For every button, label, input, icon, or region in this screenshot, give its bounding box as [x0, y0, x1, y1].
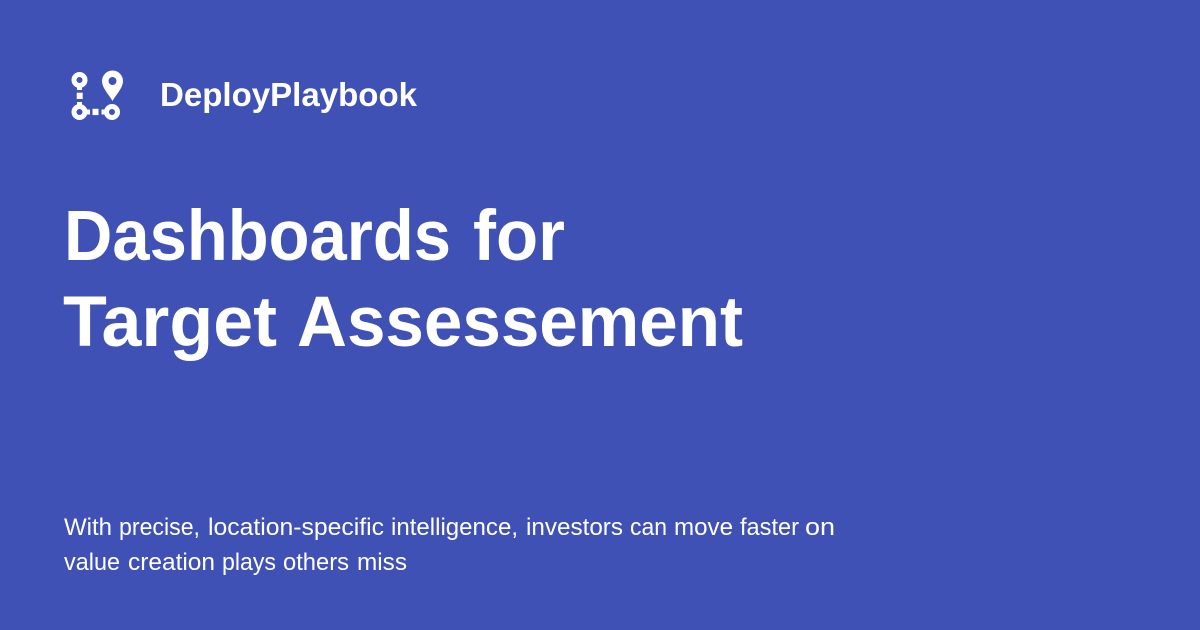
subtitle: intelligence, — [391, 514, 518, 541]
subtitle: investors — [526, 514, 623, 541]
subtitle: location-specific — [208, 514, 384, 541]
subtitle: others — [283, 549, 349, 576]
subtitle: faster — [740, 514, 799, 541]
title: Target — [63, 283, 277, 362]
title: Dashboards — [64, 197, 451, 276]
title: for — [473, 197, 565, 276]
title: Assessement — [297, 283, 743, 362]
subtitle: precise, — [119, 514, 200, 541]
icon: route with map pin — [74, 70, 123, 118]
subtitle: can — [630, 514, 667, 541]
subtitle: move — [674, 514, 733, 541]
subtitle: miss — [357, 549, 407, 576]
subtitle: plays — [222, 549, 276, 576]
subtitle — [64, 514, 835, 576]
subtitle: creation — [128, 549, 215, 576]
title — [63, 197, 743, 362]
subtitle: on — [805, 514, 835, 541]
subtitle: With — [64, 514, 112, 541]
brand name: DeployPlaybook — [160, 77, 417, 114]
subtitle: value — [64, 549, 120, 576]
